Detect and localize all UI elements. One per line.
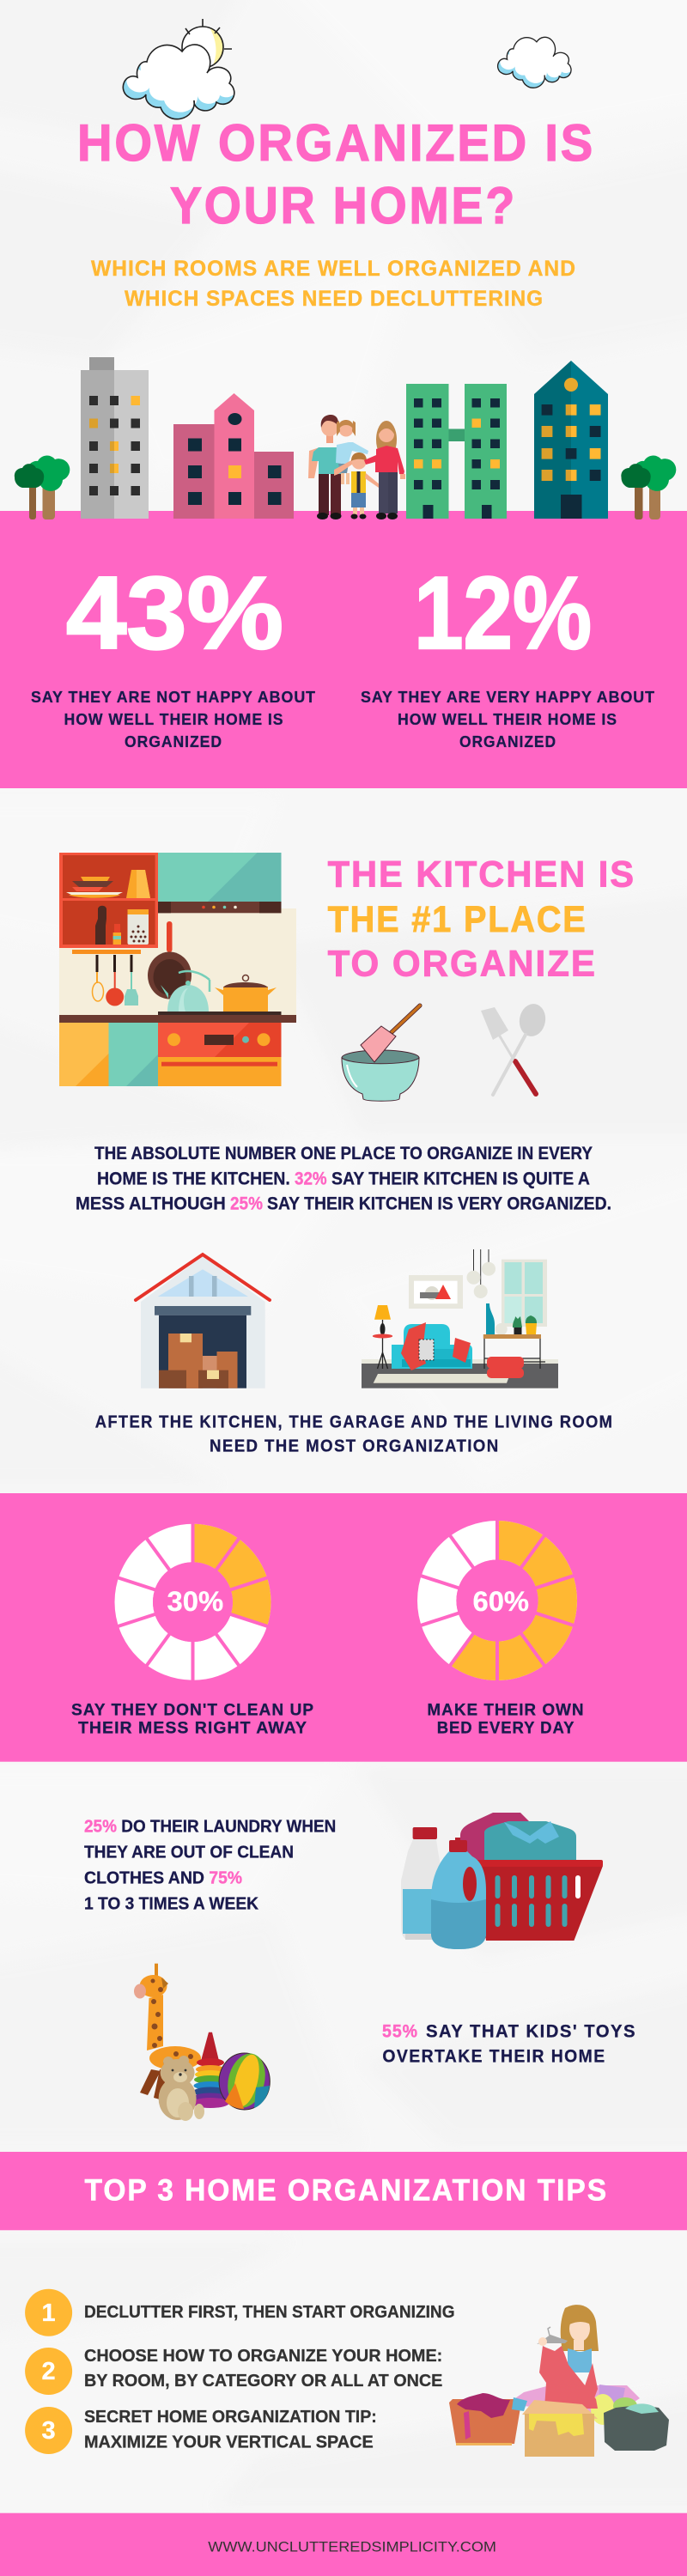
stat: 43 percent xyxy=(31,556,316,750)
text block: laundry: 75% xyxy=(209,1869,242,1888)
icon: laundry basket and detergent xyxy=(401,1813,603,1949)
text block: kitchen statistic: 32% xyxy=(295,1169,327,1188)
subtitle: WHICH SPACES NEED DECLUTTERING xyxy=(125,287,544,311)
stat: 12 percent xyxy=(361,556,655,750)
text block: toys: 55% xyxy=(382,2022,418,2042)
number badge 2: 2 xyxy=(41,2358,56,2385)
donut chart: 30 percent: 30% xyxy=(167,1586,223,1617)
number badge 3: 3 xyxy=(41,2417,56,2445)
text block: toys: SAY THAT KIDS' TOYS xyxy=(426,2022,636,2042)
title: YOUR HOME? xyxy=(170,177,517,234)
text block: kitchen statistic: SAY THEIR KITCHEN IS QUITE A xyxy=(331,1169,590,1188)
caption: HOW WELL THEIR HOME IS xyxy=(64,710,283,728)
shelf items xyxy=(66,870,150,945)
icon: family of four xyxy=(308,415,405,519)
heading: TOP 3 HOME ORGANIZATION TIPS xyxy=(84,2173,608,2207)
text block: laundry: CLOTHES AND xyxy=(84,1869,204,1888)
caption: mess xyxy=(71,1701,314,1738)
caption: HOW WELL THEIR HOME IS xyxy=(398,710,617,728)
caption: mess: SAY THEY DON'T CLEAN UP xyxy=(71,1701,314,1720)
icon: toys giraffe bear rings ball xyxy=(134,1964,271,2121)
icon: right trees xyxy=(621,456,676,519)
panel: footer band xyxy=(0,2513,687,2576)
text block: laundry: 1 TO 3 TIMES A WEEK xyxy=(84,1895,259,1914)
hanging utensils xyxy=(93,955,138,1006)
text block: kitchen statistic: MESS ALTHOUGH xyxy=(76,1194,226,1213)
tip 3: MAXIMIZE YOUR VERTICAL SPACE xyxy=(84,2433,374,2452)
donut chart: 60 percent: 60% xyxy=(472,1586,529,1617)
text block: garage and living room: AFTER THE KITCHEN, THE GARAGE AND THE LIVING ROOM xyxy=(95,1412,613,1431)
text block: kitchen statistic: 25% xyxy=(230,1194,263,1213)
text block: laundry: 25% xyxy=(84,1818,117,1837)
text block: garage and living room: NEED THE MOST ORGANIZATION xyxy=(210,1436,500,1455)
heading: the kitchen is the #1 place to organize: TO ORGANIZE xyxy=(328,945,597,985)
ball xyxy=(219,2050,271,2111)
illustration: woman sorting clothes xyxy=(449,2305,669,2457)
caption: bed: BED EVERY DAY xyxy=(437,1719,575,1738)
text block: kitchen statistic: HOME IS THE KITCHEN. xyxy=(97,1169,290,1188)
icon: crossed spoon and turner xyxy=(481,1002,548,1095)
heading: the kitchen is the #1 place to organize: THE KITCHEN IS xyxy=(328,855,635,896)
number badge 2 xyxy=(25,2348,72,2395)
ring stack xyxy=(192,2032,229,2108)
title: HOW ORGANIZED IS xyxy=(77,114,595,172)
text block: laundry: DO THEIR LAUNDRY WHEN xyxy=(121,1818,336,1837)
text block: toys: OVERTAKE THEIR HOME xyxy=(382,2047,606,2067)
panel: pink statistics band xyxy=(0,511,687,788)
text block: garage and living room xyxy=(95,1412,613,1455)
icon: green twin towers xyxy=(406,384,507,519)
caption: bed xyxy=(427,1701,585,1738)
text block: kitchen statistic: THE ABSOLUTE NUMBER ONE PLACE TO ORGANIZE IN EVERY xyxy=(94,1144,593,1163)
caption: SAY THEY ARE NOT HAPPY ABOUT xyxy=(31,688,316,706)
tip 2: CHOOSE HOW TO ORGANIZE YOUR HOME: xyxy=(84,2346,442,2366)
number badge 1 xyxy=(25,2289,72,2336)
icon: left trees xyxy=(15,456,70,519)
teddy bear xyxy=(159,2056,204,2121)
number badge 3 xyxy=(25,2407,72,2454)
panel: pink donut band xyxy=(0,1493,687,1762)
panel: tips heading band xyxy=(0,2152,687,2230)
icon: sun behind cloud xyxy=(182,19,232,68)
text block: kitchen statistic xyxy=(76,1144,611,1213)
text block: laundry: THEY ARE OUT OF CLEAN xyxy=(84,1844,294,1862)
icon: large cloud xyxy=(123,38,238,119)
icon: gray tower building xyxy=(81,357,149,519)
text block: kitchen statistic: SAY THEIR KITCHEN IS VERY ORGANIZED. xyxy=(267,1194,611,1213)
icon: pink building xyxy=(173,393,294,519)
icon: living room xyxy=(362,1249,558,1388)
big number 12%: 12% xyxy=(414,556,592,671)
caption: bed: MAKE THEIR OWN xyxy=(427,1701,585,1720)
donut chart: 30 percent xyxy=(116,1522,270,1683)
icon: mixing bowl with spatula xyxy=(342,1005,420,1101)
icon: garage with boxes xyxy=(136,1255,270,1388)
number badge 1: 1 xyxy=(41,2300,56,2327)
title xyxy=(77,114,595,234)
subtitle: WHICH ROOMS ARE WELL ORGANIZED AND xyxy=(91,257,576,281)
tip 2: BY ROOM, BY CATEGORY OR ALL AT ONCE xyxy=(84,2371,442,2391)
tip 3 xyxy=(84,2407,377,2452)
heading: the kitchen is the #1 place to organize: THE #1 PLACE xyxy=(328,900,587,940)
illustration: kitchen xyxy=(59,853,296,1086)
caption xyxy=(361,688,655,750)
caption: mess: THEIR MESS RIGHT AWAY xyxy=(78,1719,307,1738)
caption: SAY THEY ARE VERY HAPPY ABOUT xyxy=(361,688,655,706)
caption: ORGANIZED xyxy=(125,732,222,750)
tip 2 xyxy=(84,2346,442,2391)
text block: toys xyxy=(382,2022,636,2067)
big number 43%: 43% xyxy=(66,556,283,671)
tip 1: DECLUTTER FIRST, THEN START ORGANIZING xyxy=(84,2302,455,2322)
icon: small cloud xyxy=(498,33,574,88)
tip 3: SECRET HOME ORGANIZATION TIP: xyxy=(84,2407,377,2427)
heading: the kitchen is the #1 place to organize xyxy=(328,855,635,985)
caption xyxy=(31,688,316,750)
subtitle xyxy=(91,257,576,311)
caption: ORGANIZED xyxy=(459,732,556,750)
text block: laundry xyxy=(84,1818,336,1914)
icon: teal building xyxy=(534,361,608,519)
website url: WWW.UNCLUTTEREDSIMPLICITY.COM xyxy=(208,2539,496,2555)
donut chart: 60 percent xyxy=(419,1518,575,1683)
